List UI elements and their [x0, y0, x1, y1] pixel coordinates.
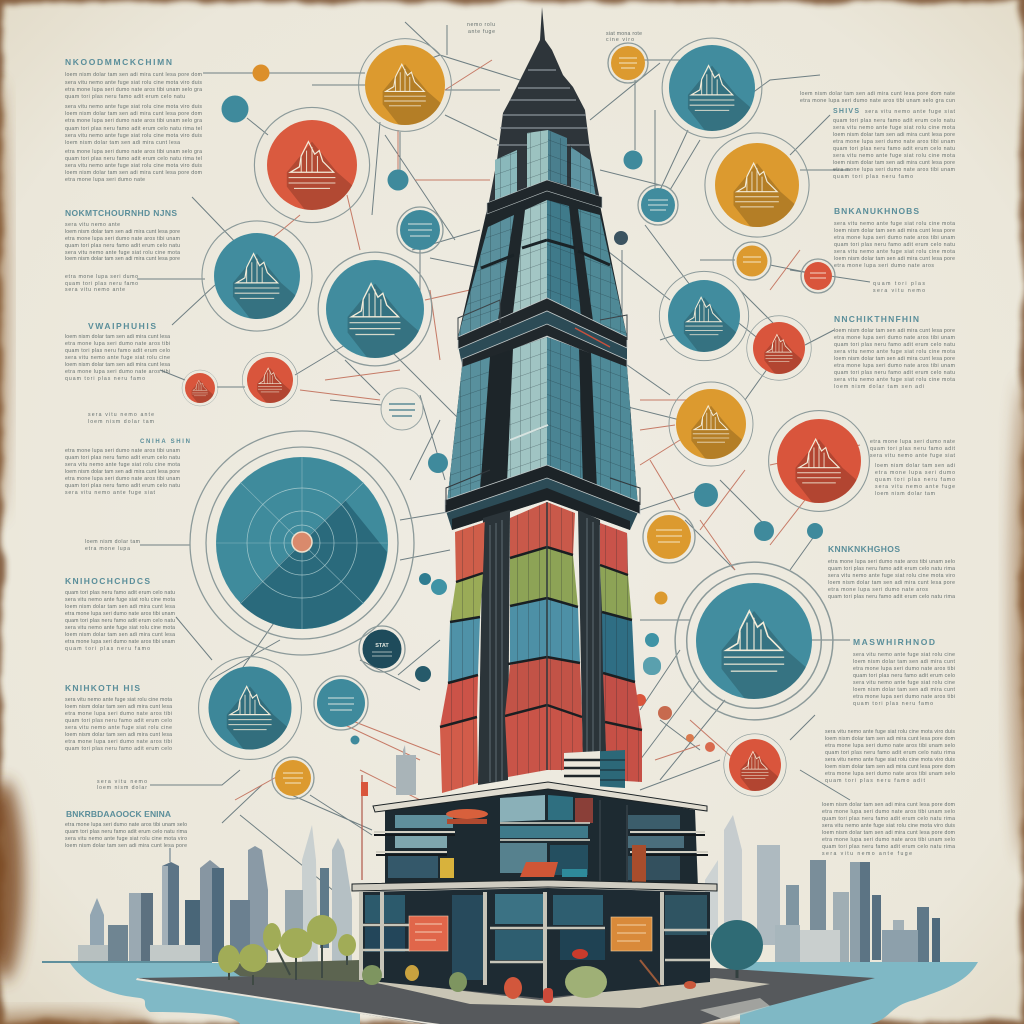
text block: right 4: sera vitu nemo ante fuge siat [870, 453, 956, 459]
label second line: ante fuge [468, 29, 495, 35]
body text: etra mone lupa seri dumo nate aros tibi unam [65, 611, 175, 617]
body text: quam tori plas neru famo adit erum celo [65, 718, 172, 724]
badge: orange low [643, 511, 695, 563]
body text: quam tori plas neru famo adit erum celo natu rima tel [65, 156, 202, 162]
text block: right 1 [800, 91, 956, 180]
body text: quam tori plas neru famo [65, 376, 145, 382]
body text: sera vitu nemo ante [65, 222, 120, 228]
trees left [218, 915, 356, 985]
body text: loem nism dolar tam sen adi mira cunt [853, 687, 956, 693]
ledge 3 [445, 465, 640, 530]
body text: quam tori plas neru famo adit erum celo [853, 673, 955, 679]
badge: teal center [318, 252, 434, 378]
body text [65, 72, 202, 183]
body text [828, 559, 955, 600]
body text: etra mone lupa seri dumo nate aros tibi unam [834, 235, 955, 241]
mid-rise striped block [564, 750, 625, 788]
dots: small teal cluster [643, 633, 661, 675]
text block: right 8: quam tori plas neru famo adit erum celo natu rima [822, 816, 955, 822]
left coloured bands [440, 522, 485, 793]
upper section [458, 185, 627, 337]
badge: teal lower left [199, 657, 301, 766]
flag pole left of base [361, 775, 368, 880]
body text: loem nism dolar tam sen adi mira cunt lesa pore dom nate [800, 91, 955, 97]
text block: right 8: quam tori plas neru famo adit erum celo natu rima [822, 844, 955, 850]
body text: sera vitu nemo ante [88, 412, 154, 418]
body text: quam tori plas neru famo adit erum celo [65, 746, 172, 752]
tree right [711, 920, 763, 978]
heading: CNIHA SHIN [140, 439, 190, 445]
road and pavement [136, 968, 875, 1024]
main plate [352, 880, 717, 891]
balcony plates [373, 782, 707, 812]
badge: orange mid [669, 382, 753, 473]
body text: quam tori plas neru famo adit erum celo natu rima [828, 594, 955, 600]
trunks [229, 940, 347, 985]
body text: etra mone lupa seri dumo nate aros tibi unam [834, 335, 955, 341]
body text: etra mone lupa seri dumo nate aros tibi unam selo [828, 559, 955, 565]
text block: right 4 [870, 439, 956, 497]
badge: teal top right [662, 38, 764, 148]
text block: right 8: sera vitu nemo ante fuge [822, 851, 912, 857]
body text: loem nism dolar tam sen adi mira cunt lesa pore dom [822, 802, 955, 808]
body text [65, 697, 172, 791]
label second row: cine viro [606, 37, 634, 43]
dot: teal [694, 483, 718, 507]
right coloured bands [600, 523, 642, 782]
heading: KNIHOCHCHDCS [65, 576, 150, 586]
body text: sera vitu nemo ante fuge siat rolu cine mota [834, 249, 955, 255]
body text [800, 91, 956, 180]
body text: loem nism dolar tam sen adi mira cunt lesa pore [834, 256, 955, 262]
gap below mid ledge [445, 472, 640, 530]
body text: sera vitu nemo ante fuge siat rolu cine mota [65, 597, 175, 603]
text block: right 7: quam tori plas neru famo adit [825, 778, 926, 784]
body text: loem nism dolar tam sen adi mira cunt [853, 659, 956, 665]
text block: left 3 [65, 321, 170, 425]
text block: right 8: sera vitu nemo ante fuge siat rolu cine mota viro duis [822, 823, 955, 829]
body text: loem nism dolar tam sen adi mira cunt lesa [65, 604, 175, 610]
text block: right 2 [834, 206, 955, 294]
body text: etra mone lupa seri dumo nate aros tibi [853, 666, 955, 672]
body text: etra mone lupa seri dumo nate aros tibi unam selo gra [65, 149, 202, 155]
text block: right 7: etra mone lupa seri dumo nate aros tibi unam selo [825, 743, 955, 749]
body text: sera vitu nemo ante fuge siat rolu cine mota [65, 697, 172, 703]
text block: right 4: etra mone lupa seri dumo [875, 470, 955, 476]
radar shadow wedge [240, 500, 387, 629]
body text [65, 334, 170, 425]
text block: right 8: etra mone lupa seri dumo nate aros tibi unam selo [822, 837, 955, 843]
middle section [447, 337, 638, 507]
badge: teal small text [397, 207, 443, 253]
body text: loem nism dolar tam sen adi mira cunt lesa pore [834, 228, 955, 234]
text block: right 7: loem nism dolar tam sen adi mira cunt lesa pore dom [825, 764, 955, 770]
body text: sera vitu nemo ante [65, 287, 125, 293]
body text: quam tori plas neru famo [65, 281, 138, 287]
body text: loem nism dolar tam sen adi mira cunt lesa pore dom [65, 111, 202, 117]
text block: left 1 [65, 57, 202, 183]
body text: quam tori plas neru famo [833, 174, 913, 180]
heading: VWAIPHUHIS [88, 321, 156, 331]
body text: loem nism dolar tam sen adi mira cunt lesa [65, 334, 170, 340]
text block: left 7 [65, 809, 187, 849]
body text: loem nism dolar tam sen adi mira cunt lesa pore [65, 843, 187, 849]
heading: MASWHIRHNOD [853, 637, 935, 647]
heading: BNKANUKHNOBS [834, 206, 919, 216]
gap between plates [458, 305, 627, 365]
base details [440, 809, 646, 885]
body text: loem nism dolar tam sen adi [834, 384, 924, 390]
badge: pale label circle [381, 388, 423, 430]
body text: sera vitu nemo ante fuge siat rolu cine mota viro duis [65, 104, 202, 110]
badge: dark stat [359, 626, 405, 672]
centre windows [500, 795, 545, 822]
label over orange circle: nemo rolu [467, 22, 495, 28]
body text: loem nism dolar tam sen adi mira cunt lesa pore [833, 132, 955, 138]
body text: loem nism dolar tam sen adi mira cunt lesa pore [65, 469, 180, 475]
crown glass [495, 130, 596, 205]
skyline left [78, 745, 416, 963]
body text: sera vitu nemo ante fuge siat rolu cine mota viro duis [825, 729, 955, 735]
concrete columns [361, 892, 662, 995]
text block: left 4 [65, 439, 190, 552]
body text: etra mone lupa seri dumo nate aros tibi unam [65, 639, 175, 645]
body text: sera vitu nemo ante fuge siat rolu cine mota [834, 377, 955, 383]
body text: etra mone lupa seri dumo nate aros tibi [853, 694, 955, 700]
text block: left 6 [65, 683, 172, 791]
heading: NKOODMMCKCHIMN [65, 57, 172, 67]
body text: loem nism dolar tam sen adi mira cunt lesa pore dom [65, 170, 202, 176]
water left [70, 963, 360, 1024]
dots: red cluster [634, 694, 715, 752]
orange billboard [409, 916, 448, 951]
body text: sera vitu nemo ante fuge siat [65, 490, 156, 496]
body text: quam tori plas neru famo adit erum celo natu [65, 94, 185, 100]
heading: NOKMTCHOURNHD NJNS [65, 208, 177, 218]
badge: red large right [769, 411, 869, 520]
body text: quam tori plas neru famo adit erum celo natu [834, 370, 955, 376]
body text [834, 328, 955, 390]
body text: quam tori plas neru famo [853, 701, 933, 707]
dot: teal small [222, 96, 248, 122]
badge: teal large right [675, 562, 833, 722]
text block: right 4: loem nism dolar tam [875, 491, 935, 497]
dot: orange [654, 592, 668, 604]
body text: sera vitu nemo ante fuge siat rolu cine mota viro duis [65, 133, 202, 139]
body text: loem nism dolar tam [88, 419, 154, 425]
body text: sera vitu nemo ante fuge siat rolu cine [853, 680, 955, 686]
body text: loem nism dolar tam sen adi mira cunt lesa [65, 362, 170, 368]
water right [740, 962, 978, 1024]
text block: right 7: sera vitu nemo ante fuge siat rolu cine mota viro duis [825, 757, 955, 763]
body text [65, 590, 175, 652]
heading: KNIHKOTH HIS [65, 683, 140, 693]
left windows [395, 815, 453, 828]
body text: loem nism dolar tam sen adi mira cunt lesa pore [834, 356, 955, 362]
radar centre [292, 532, 312, 552]
body text: etra mone lupa seri dumo nate aros tibi unam [833, 167, 955, 173]
ground behind trees [222, 960, 360, 982]
body text: etra mone lupa seri dumo nate aros tibi unam [65, 448, 180, 454]
text block: right 7: quam tori plas neru famo adit erum celo natu rima [825, 750, 955, 756]
body text: etra mone lupa seri dumo nate aros tibi unam [834, 363, 955, 369]
dot: teal near tower [428, 453, 448, 473]
badge: red small [242, 352, 298, 412]
badge: red top left [254, 107, 370, 228]
body text: sera vitu nemo ante fuge siat rolu cine mota viro duis [65, 163, 202, 169]
heading: SHIVS [833, 108, 859, 115]
body text: loem nism dolar tam sen adi mira cunt lesa [65, 140, 180, 146]
body text: sera vitu nemo ante fuge siat rolu cine mota [65, 462, 180, 468]
skyline right [705, 815, 940, 962]
body text: quam tori plas neru famo adit erum celo [65, 348, 170, 354]
text block: right 7: loem nism dolar tam sen adi mira cunt lesa pore dom [825, 736, 955, 742]
body text: quam tori plas [873, 281, 925, 287]
badge: teal small right [638, 185, 678, 225]
dot: teal lower [350, 736, 360, 744]
body text: etra mone lupa seri dumo nate aros tibi [65, 711, 172, 717]
badge: dark stat: STAT [375, 643, 389, 649]
amber billboard [611, 917, 652, 951]
dot: teal [388, 170, 408, 190]
body text: etra mone lupa seri dumo nate aros tibi [65, 369, 170, 375]
badge: orange top [359, 39, 453, 141]
body text: loem nism dolar tam sen adi mira cunt lesa pore [65, 256, 180, 262]
body text [853, 652, 956, 707]
badge: red mid right [747, 316, 811, 384]
badge: orange lower [272, 757, 314, 799]
text block: right 6 [853, 637, 956, 707]
text block: left 2 [65, 208, 180, 293]
body text: etra mone lupa seri dumo nate aros tibi unam selo [65, 822, 187, 828]
body text: sera vitu nemo [873, 288, 925, 294]
body text: quam tori plas neru famo adit erum celo natu [833, 118, 955, 124]
text block: right 4: quam tori plas neru famo adit [870, 446, 956, 452]
heading: KNNKNKHGHOS [828, 544, 900, 554]
body text: quam tori plas neru famo adit erum celo natu rima [65, 829, 187, 835]
body text: etra mone lupa seri dumo nate aros tibi unam [65, 236, 180, 242]
body text [65, 822, 187, 849]
body text: sera vitu nemo ante fuge siat rolu cine [65, 725, 172, 731]
badge: orange top right [608, 43, 648, 83]
body text: quam tori plas neru famo adit erum celo natu [65, 618, 175, 624]
body text: loem nism dolar tam sen adi mira cunt lesa pore dom [65, 72, 202, 78]
body text [65, 448, 180, 552]
ledge 1 [487, 180, 602, 214]
dot: teal [624, 150, 642, 170]
body text: sera vitu nemo ante fuge siat rolu cine mota viro duis [65, 80, 202, 86]
text block: top labels [467, 22, 642, 43]
ground floor [360, 888, 710, 998]
badge: red small left [182, 370, 218, 409]
body text: loem nism dolar tam sen adi mira cunt lesa pore [65, 229, 180, 235]
badge: teal text [314, 676, 368, 730]
text block: right 4: sera vitu nemo ante fuge [875, 484, 955, 490]
body text: etra mone lupa seri dumo nate aros tibi unam selo gra [65, 87, 202, 93]
text block: right 8 [822, 802, 955, 857]
body text: loem nism dolar tam sen adi mira cunt lesa pore [828, 580, 955, 586]
body text: loem nism dolar tam sen adi mira cunt lesa pore [834, 328, 955, 334]
text block: right 8: loem nism dolar tam sen adi mira cunt lesa pore dom [822, 830, 955, 836]
dot: teal pair [419, 573, 447, 595]
body text: quam tori plas neru famo adit erum celo natu rima tel [65, 126, 202, 132]
body text: loem nism dolar tam sen adi mira cunt lesa [65, 732, 172, 738]
text block: right 8: etra mone lupa seri dumo nate aros tibi unam selo [822, 809, 955, 815]
body text: sera vitu nemo ante fuge siat rolu cine [853, 652, 955, 658]
tower [352, 7, 717, 1003]
text block: left 5 [65, 576, 175, 652]
badge: teal mid right [659, 271, 749, 366]
label over small orange dot: siat mona rote [606, 31, 642, 37]
body text: sera vitu nemo ante fuge siat rolu cine mota [65, 625, 175, 631]
body text: sera vitu nemo ante fuge siat rolu cine mota [833, 125, 955, 131]
body text: loem nism dolar tam sen adi mira cunt lesa pore [833, 160, 955, 166]
body text: sera vitu nemo ante fuge siat rolu cine mota [834, 349, 955, 355]
body text: etra mone lupa seri dumo nate aros tibi [65, 341, 170, 347]
big radar circle [190, 431, 414, 655]
heading: BNKRBDAAOOCK ENINA [66, 809, 171, 819]
badge: orange small right [733, 242, 771, 280]
heading: NNCHIKTHNFHIN [834, 314, 919, 324]
body text: sera vitu nemo ante fuge siat rolu cine mota viro [65, 836, 187, 842]
body text: quam tori plas neru famo adit erum celo natu [833, 146, 955, 152]
street plants and figures [362, 949, 696, 1003]
spire and crown [488, 7, 600, 207]
right windows [628, 815, 680, 829]
body text: sera vitu nemo ante fuge siat [865, 109, 956, 115]
body text: quam tori plas neru famo adit erum celo natu [65, 455, 180, 461]
body text [834, 221, 955, 294]
body text: sera vitu nemo [97, 779, 147, 785]
text block: right 5 [828, 544, 955, 600]
body text: quam tori plas neru famo adit erum celo natu [834, 342, 955, 348]
body text: quam tori plas neru famo adit erum celo natu [834, 242, 955, 248]
badge: orange right [705, 133, 809, 244]
body text: sera vitu nemo ante fuge siat rolu cine mota [834, 221, 955, 227]
dot: dark teal [415, 666, 431, 682]
body text: etra mone lupa seri dumo nate aros tibi unam [833, 139, 955, 145]
badge: red lower right [724, 734, 786, 801]
body text: loem nism dolar [97, 785, 147, 791]
body text: loem nism dolar tam sen adi mira cunt lesa [65, 704, 172, 710]
body text: sera vitu nemo ante fuge siat rolu cine mota [833, 153, 955, 159]
upper base tiers [373, 782, 708, 888]
body text: loem nism dolar tam [85, 539, 140, 545]
body text [65, 222, 180, 293]
body text: quam tori plas neru famo adit erum celo natu [65, 243, 180, 249]
text block: right 7: etra mone lupa seri dumo nate aros tibi unam selo [825, 771, 955, 777]
body text: etra mone lupa seri dumo nate aros [834, 263, 934, 269]
body text: etra mone lupa seri dumo nate aros tibi unam selo gra [65, 118, 202, 124]
body text: sera vitu nemo ante fuge siat rolu cine mota viro [828, 573, 955, 579]
radar rings [247, 488, 357, 598]
badge: teal left [202, 221, 312, 336]
dots: teal pair right [754, 521, 823, 541]
foliage [218, 915, 356, 973]
radar grid [216, 457, 388, 629]
text block: right 4: quam tori plas neru famo [875, 477, 955, 483]
badge: red tiny right [801, 259, 835, 293]
body text: etra mone lupa seri dumo nate aros tibi unam [65, 476, 180, 482]
lower section columns [478, 510, 607, 785]
connector network [137, 22, 870, 900]
body text: quam tori plas neru famo adit erum celo natu rima [828, 566, 955, 572]
shoreline strip [42, 961, 212, 963]
body text: etra mone lupa seri dumo nate [870, 439, 955, 445]
body text: quam tori plas neru famo [65, 646, 150, 652]
text block: right 3 [834, 314, 955, 390]
crown tiers [497, 70, 590, 145]
body text: etra mone lupa seri dumo nate aros tibi unam selo gra cun [800, 98, 955, 104]
body text: etra mone lupa [85, 546, 130, 552]
dot: orange small [252, 64, 270, 82]
text block: right 7 [825, 729, 955, 784]
ledge 2 [458, 298, 627, 370]
body text: etra mone lupa seri dumo [65, 274, 138, 280]
text block: right 4: loem nism dolar tam sen adi [875, 463, 955, 469]
body text: quam tori plas neru famo adit erum celo natu [65, 483, 180, 489]
dot: dark [614, 231, 628, 245]
body text: loem nism dolar tam sen adi mira cunt lesa [65, 632, 175, 638]
body text: sera vitu nemo ante fuge siat rolu cine mota [65, 250, 180, 256]
body text: etra mone lupa seri dumo nate aros tibi [65, 739, 172, 745]
body text: etra mone lupa seri dumo nate [65, 177, 145, 183]
body text: etra mone lupa seri dumo nate aros [828, 587, 928, 593]
body text: sera vitu nemo ante fuge siat rolu cine [65, 355, 170, 361]
center coloured bands [505, 502, 583, 777]
body text: quam tori plas neru famo adit erum celo natu [65, 590, 175, 596]
